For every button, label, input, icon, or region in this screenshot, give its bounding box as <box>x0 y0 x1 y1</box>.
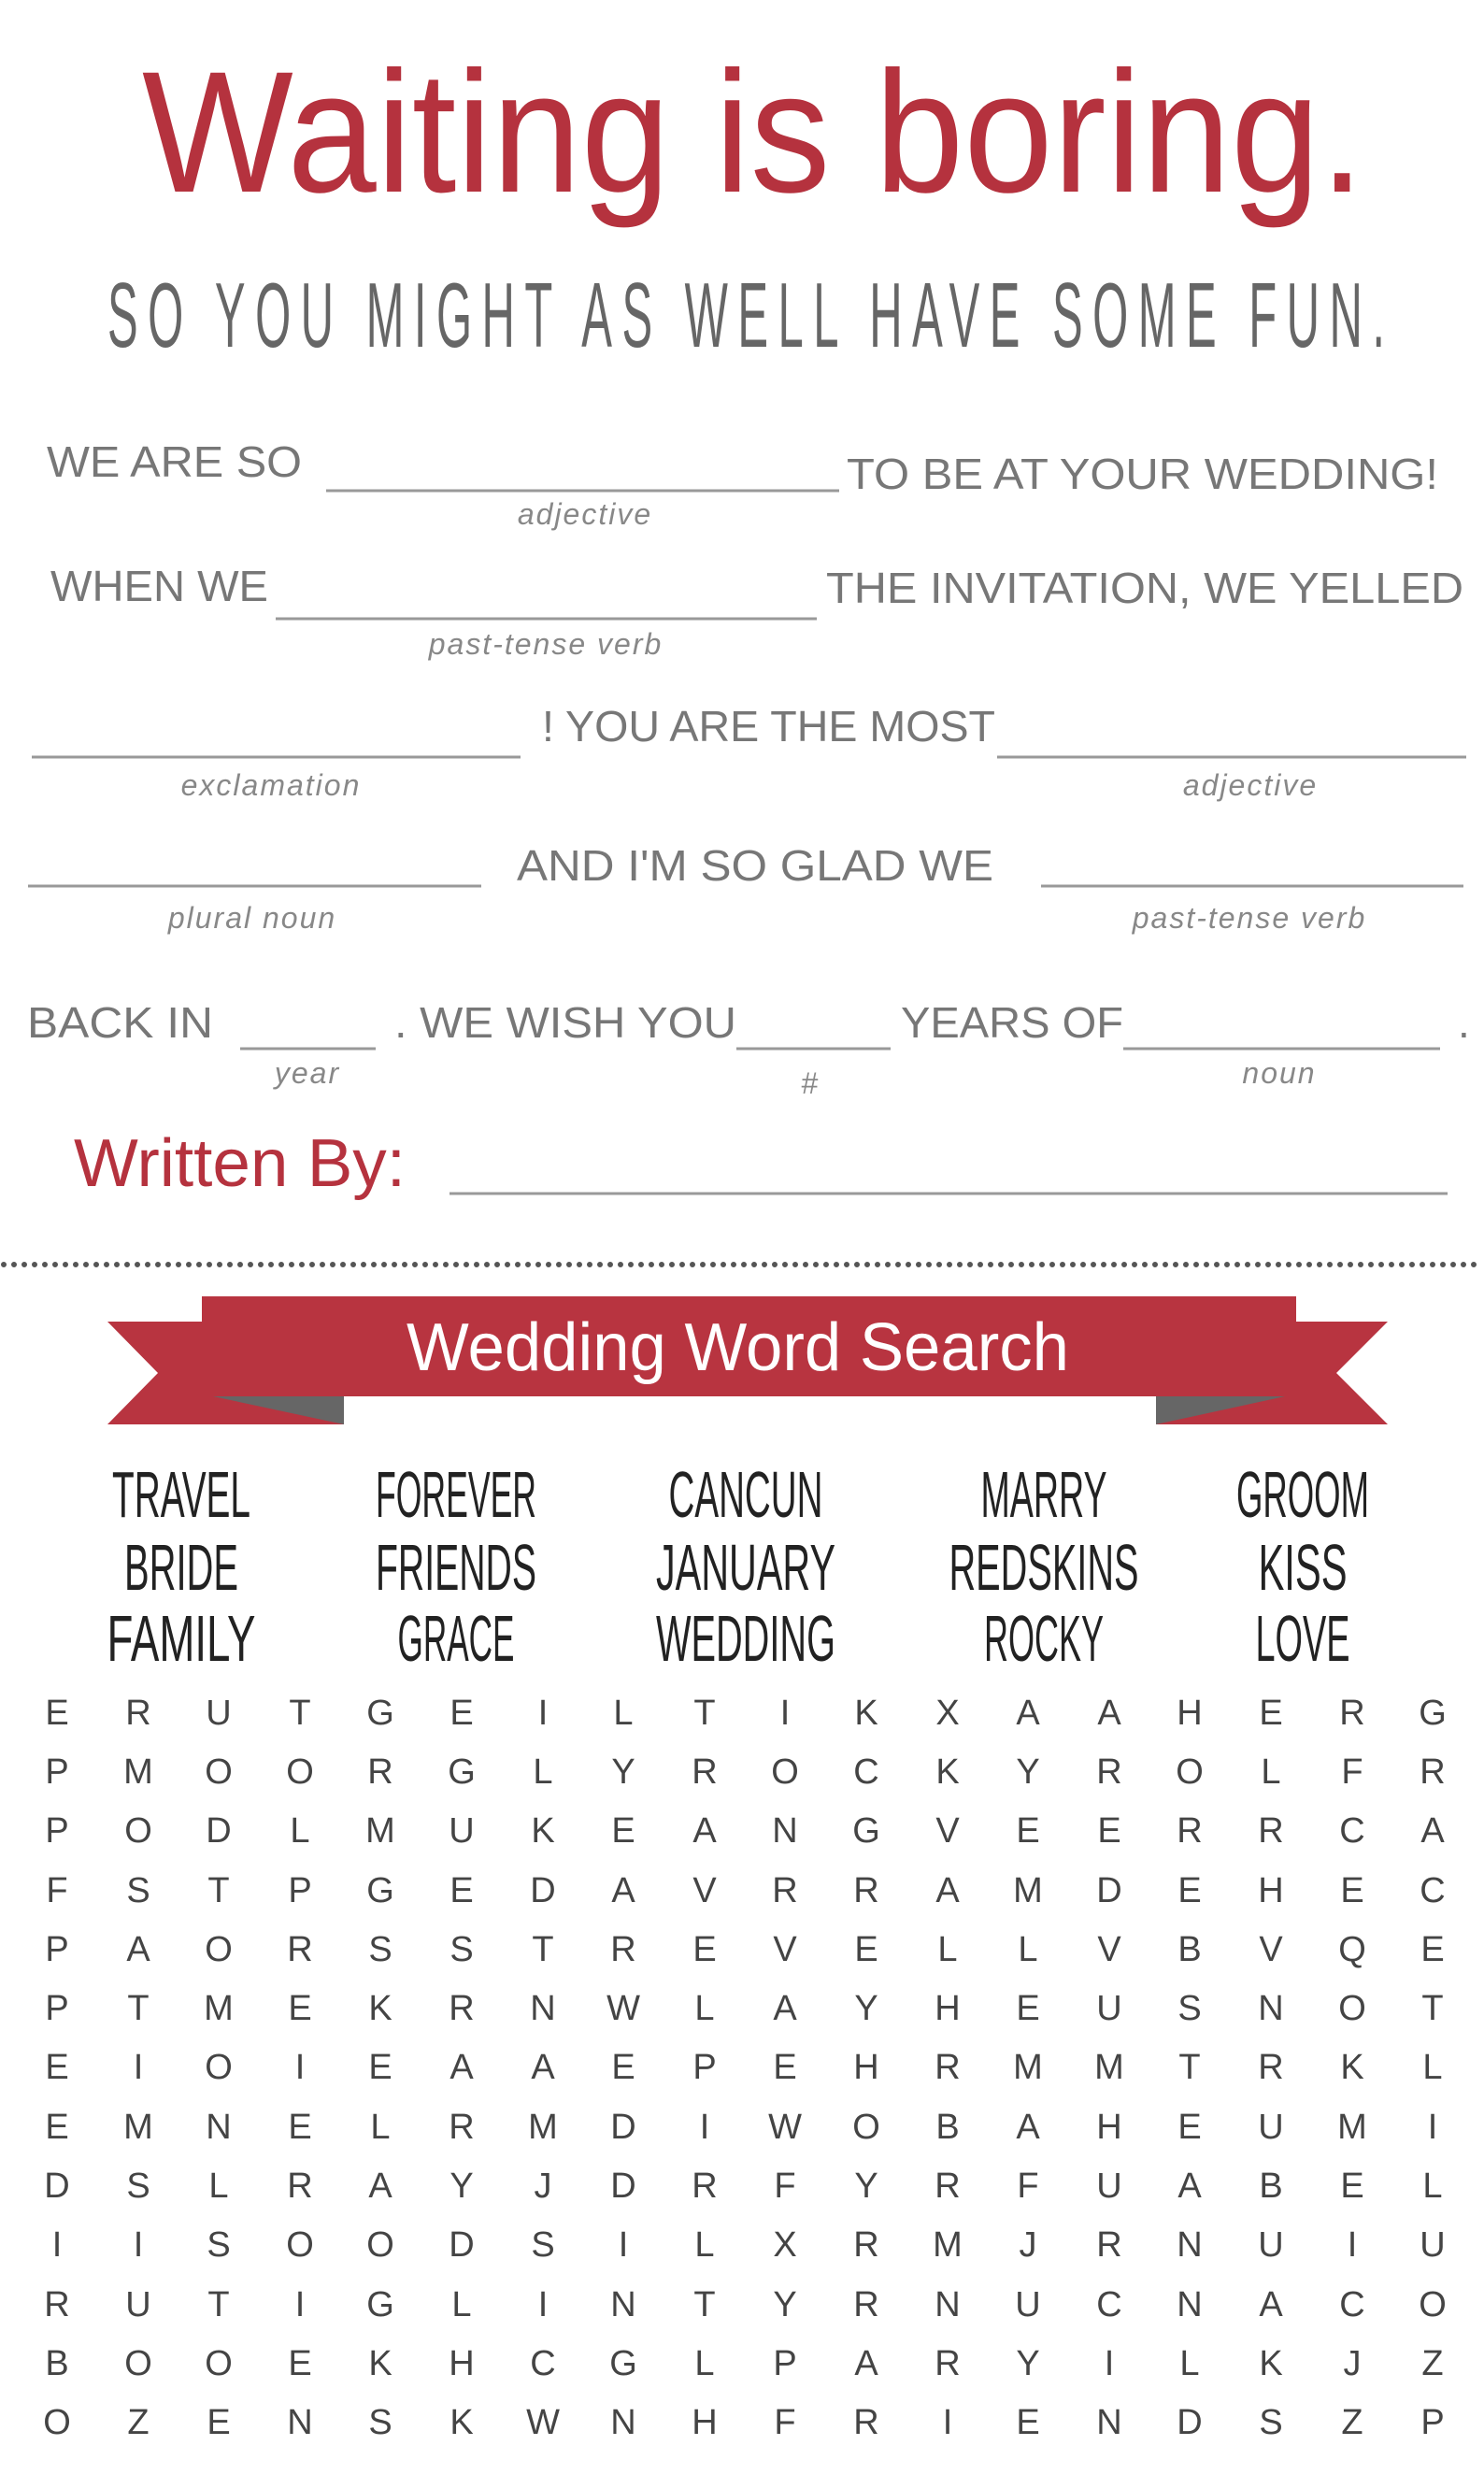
word search grid: A <box>854 2344 878 2383</box>
word search grid: V <box>692 1871 717 1910</box>
word search grid: I <box>619 2225 628 2265</box>
word search grid: S <box>368 2403 392 2442</box>
word search grid: M <box>204 1989 234 2028</box>
word search grid: R <box>1096 1752 1122 1792</box>
mad lib: row 5 <box>27 998 1470 1100</box>
word list: FAMILY <box>107 1602 256 1675</box>
word search grid: U <box>449 1811 475 1851</box>
word search grid: D <box>610 2167 636 2206</box>
word search grid: L <box>290 1811 310 1851</box>
word search grid: E <box>854 1930 878 1969</box>
word search grid: O <box>1338 1989 1366 2028</box>
word search grid: R <box>853 2403 879 2442</box>
word list <box>107 1458 1369 1675</box>
mad lib: row 3: ! YOU ARE THE MOST <box>542 702 995 751</box>
mad lib: row 3: exclamation <box>181 768 361 802</box>
word search grid: W <box>606 1989 640 2028</box>
word search grid: O <box>124 1811 152 1851</box>
word search grid: G <box>366 2285 394 2324</box>
word search grid: F <box>774 2403 796 2442</box>
word search grid: D <box>206 1811 232 1851</box>
word search grid: U <box>1258 2225 1284 2265</box>
word search grid: J <box>1019 2225 1037 2265</box>
word search grid: R <box>1420 1752 1446 1792</box>
word search grid: E <box>368 2048 392 2087</box>
mad lib: row 4 <box>28 841 1463 935</box>
word search grid: L <box>533 1752 553 1792</box>
word search grid: N <box>1177 2225 1203 2265</box>
word search grid: E <box>1016 1989 1040 2028</box>
word search grid: E <box>449 1694 474 1733</box>
word search grid: O <box>286 2225 314 2265</box>
word search grid: K <box>854 1694 878 1733</box>
word search grid: I <box>538 2285 548 2324</box>
word search grid: U <box>1258 2108 1284 2147</box>
word search grid: T <box>532 1930 554 1969</box>
word search grid: E <box>449 1871 474 1910</box>
word search grid: V <box>935 1811 960 1851</box>
word search grid: E <box>611 1811 635 1851</box>
word search grid: B <box>1177 1930 1202 1969</box>
word search grid: A <box>368 2167 392 2206</box>
word search grid: N <box>772 1811 798 1851</box>
word search grid: G <box>609 2344 637 2383</box>
word search grid: J <box>535 2167 551 2206</box>
mad lib: row 5: BACK IN <box>27 998 213 1047</box>
word search grid: N <box>530 1989 556 2028</box>
word search grid: U <box>1420 2225 1446 2265</box>
word search grid: Y <box>854 1989 878 2028</box>
mad lib: row 1: WE ARE SO <box>47 437 302 486</box>
word search grid: E <box>1097 1811 1121 1851</box>
word search grid: L <box>451 2285 472 2324</box>
mad lib: row 2 <box>50 562 1463 661</box>
word list: TRAVEL <box>112 1458 250 1531</box>
word search grid: X <box>773 2225 797 2265</box>
word search grid: L <box>613 1694 634 1733</box>
word search grid: O <box>366 2225 394 2265</box>
word search grid: R <box>1096 2225 1122 2265</box>
word search grid: M <box>933 2225 963 2265</box>
word search grid: N <box>1258 1989 1284 2028</box>
word search grid: B <box>45 2344 69 2383</box>
word search grid: R <box>1258 1811 1284 1851</box>
word search grid: L <box>694 2344 715 2383</box>
word search grid: A <box>531 2048 555 2087</box>
word search grid: M <box>123 1752 153 1792</box>
word list: REDSKINS <box>949 1531 1138 1604</box>
word search grid: P <box>288 1871 312 1910</box>
word search grid: I <box>295 2285 305 2324</box>
mad lib: row 1: adjective <box>518 497 652 531</box>
word search grid: T <box>1421 1989 1444 2028</box>
word search grid: F <box>774 2167 796 2206</box>
word search grid: K <box>531 1811 555 1851</box>
word search grid: G <box>852 1811 880 1851</box>
word search grid: U <box>125 2285 151 2324</box>
word search grid: B <box>1259 2167 1283 2206</box>
word search grid: Z <box>127 2403 150 2442</box>
word list: GRACE <box>398 1602 514 1675</box>
word search grid: L <box>937 1930 958 1969</box>
word search grid: S <box>1259 2403 1283 2442</box>
word search grid: F <box>1341 1752 1363 1792</box>
word search grid: R <box>1258 2048 1284 2087</box>
word search grid: C <box>530 2344 556 2383</box>
word search grid: H <box>1096 2108 1122 2147</box>
word search grid: M <box>1337 2108 1367 2147</box>
word search grid: I <box>52 2225 62 2265</box>
mad lib: row 3: adjective <box>1183 768 1318 802</box>
word search grid: D <box>1096 1871 1122 1910</box>
word search grid: U <box>206 1694 232 1733</box>
word search grid: E <box>45 1694 69 1733</box>
word search grid: J <box>1344 2344 1361 2383</box>
word search grid: R <box>610 1930 636 1969</box>
word search grid: Y <box>773 2285 797 2324</box>
word search grid: P <box>1420 2403 1445 2442</box>
word search grid: R <box>449 2108 475 2147</box>
word search grid: P <box>692 2048 717 2087</box>
word search grid: K <box>368 2344 392 2383</box>
word list: KISS <box>1258 1531 1348 1604</box>
word search grid: R <box>853 2285 879 2324</box>
mad lib: row 5: YEARS OF <box>901 998 1123 1047</box>
word search grid: T <box>207 1871 230 1910</box>
word search grid: R <box>935 2344 961 2383</box>
word search grid: N <box>610 2403 636 2442</box>
word search grid: I <box>1428 2108 1437 2147</box>
word search grid: E <box>1177 1871 1202 1910</box>
word search grid: E <box>1016 2403 1040 2442</box>
word search grid: V <box>1259 1930 1283 1969</box>
word search grid: L <box>694 2225 715 2265</box>
word search grid: L <box>370 2108 391 2147</box>
word search grid: H <box>935 1989 961 2028</box>
word search grid: N <box>1177 2285 1203 2324</box>
mad lib: row 5: . WE WISH YOU <box>394 998 736 1047</box>
mad lib: row 4: past-tense verb <box>1132 901 1366 935</box>
word search grid: A <box>1259 2285 1283 2324</box>
mad lib: row 4: AND I'M SO GLAD WE <box>517 841 993 890</box>
subtitle: SO YOU MIGHT AS WELL HAVE SOME FUN. <box>107 265 1385 367</box>
word search grid: A <box>1420 1811 1445 1851</box>
mad lib: row 5: # <box>801 1066 819 1100</box>
word search grid: L <box>1018 1930 1038 1969</box>
word search grid: R <box>935 2048 961 2087</box>
title: Waiting is boring. <box>142 36 1364 229</box>
word search grid: L <box>1422 2048 1443 2087</box>
word search grid: T <box>207 2285 230 2324</box>
word search grid: E <box>1016 1811 1040 1851</box>
word search grid: H <box>692 2403 718 2442</box>
word search grid: M <box>1013 1871 1043 1910</box>
word search grid: K <box>1259 2344 1283 2383</box>
mad lib: row 2: past-tense verb <box>428 627 663 661</box>
word list: GROOM <box>1236 1458 1369 1531</box>
word search grid: C <box>1420 1871 1446 1910</box>
word search grid: I <box>1348 2225 1357 2265</box>
word search grid: P <box>45 1930 69 1969</box>
word search grid: I <box>700 2108 709 2147</box>
word search grid: I <box>538 1694 548 1733</box>
word search grid: E <box>1340 1871 1364 1910</box>
word search grid: T <box>127 1989 150 2028</box>
word search grid: R <box>287 2167 313 2206</box>
word search grid: K <box>449 2403 474 2442</box>
banner: Wedding Word Search: Wedding Word Search <box>407 1310 1069 1385</box>
word search grid: S <box>1177 1989 1202 2028</box>
word search grid: P <box>45 1811 69 1851</box>
word search grid: O <box>1176 1752 1204 1792</box>
word search grid: E <box>692 1930 717 1969</box>
word search grid: E <box>611 2048 635 2087</box>
word search grid: F <box>46 1871 68 1910</box>
word list: JANUARY <box>656 1531 835 1604</box>
word search grid: E <box>207 2403 231 2442</box>
word search grid: M <box>1094 2048 1124 2087</box>
word search grid: E <box>1177 2108 1202 2147</box>
word search grid: U <box>1015 2285 1041 2324</box>
word search grid: A <box>611 1871 635 1910</box>
word search grid: P <box>773 2344 797 2383</box>
word search grid: S <box>531 2225 555 2265</box>
word search grid: R <box>692 2167 718 2206</box>
word search grid: Y <box>1016 2344 1040 2383</box>
word search grid: E <box>45 2048 69 2087</box>
word search grid: R <box>853 1871 879 1910</box>
word search grid: A <box>1097 1694 1121 1733</box>
word search grid: T <box>693 1694 716 1733</box>
mad lib: row 1 <box>47 437 1438 531</box>
word search grid: M <box>123 2108 153 2147</box>
word search grid: I <box>780 1694 790 1733</box>
word search grid: R <box>692 1752 718 1792</box>
word search grid: O <box>124 2344 152 2383</box>
word search grid: G <box>366 1694 394 1733</box>
word search grid: F <box>1017 2167 1039 2206</box>
word search grid: E <box>1420 1930 1445 1969</box>
word list: WEDDING <box>656 1602 835 1675</box>
word search grid: C <box>1096 2285 1122 2324</box>
word search grid: D <box>530 1871 556 1910</box>
word search grid: I <box>134 2048 143 2087</box>
word search grid: S <box>207 2225 231 2265</box>
mad lib: row 5: year <box>273 1056 340 1090</box>
word search grid: E <box>45 2108 69 2147</box>
word search grid: O <box>205 1930 233 1969</box>
word search grid: A <box>449 2048 474 2087</box>
word search grid: A <box>1177 2167 1202 2206</box>
word search grid: C <box>1339 1811 1365 1851</box>
word search grid: E <box>1340 2167 1364 2206</box>
word search grid: W <box>526 2403 560 2442</box>
word search grid: R <box>287 1930 313 1969</box>
word search grid: N <box>610 2285 636 2324</box>
word search grid: R <box>367 1752 393 1792</box>
word search grid: T <box>693 2285 716 2324</box>
word search grid: K <box>1340 2048 1364 2087</box>
word search grid: I <box>1105 2344 1114 2383</box>
word search grid: P <box>45 1752 69 1792</box>
word list: CANCUN <box>669 1458 822 1531</box>
word search grid: D <box>1177 2403 1203 2442</box>
mad lib: row 1: TO BE AT YOUR WEDDING! <box>847 450 1438 498</box>
mad lib: row 5: noun <box>1242 1056 1317 1090</box>
word search grid: R <box>772 1871 798 1910</box>
word search grid: W <box>768 2108 802 2147</box>
word search grid: S <box>126 2167 150 2206</box>
word search grid: K <box>368 1989 392 2028</box>
word search grid: H <box>449 2344 475 2383</box>
word search grid: E <box>773 2048 797 2087</box>
word search grid: S <box>368 1930 392 1969</box>
word search grid: V <box>1097 1930 1121 1969</box>
word search grid: D <box>610 2108 636 2147</box>
word search grid: O <box>205 2344 233 2383</box>
word search grid: O <box>852 2108 880 2147</box>
word search grid: D <box>449 2225 475 2265</box>
word list: MARRY <box>981 1458 1106 1531</box>
word search grid: O <box>771 1752 799 1792</box>
word list: FOREVER <box>376 1458 536 1531</box>
word search grid: S <box>449 1930 474 1969</box>
word search grid: I <box>134 2225 143 2265</box>
banner: Wedding Word Search <box>107 1296 1388 1424</box>
word search grid: L <box>208 2167 229 2206</box>
word search grid: S <box>126 1871 150 1910</box>
word search grid: R <box>449 1989 475 2028</box>
word search grid: M <box>1013 2048 1043 2087</box>
mad lib: row 2: THE INVITATION, WE YELLED <box>826 564 1463 612</box>
word search grid: U <box>1096 1989 1122 2028</box>
word search grid: L <box>1261 1752 1281 1792</box>
word search grid: E <box>288 2344 312 2383</box>
mad lib: row 5: . <box>1458 998 1470 1047</box>
word search grid: G <box>366 1871 394 1910</box>
word search grid: O <box>43 2403 71 2442</box>
word search grid <box>43 1694 1447 2442</box>
word search grid: I <box>295 2048 305 2087</box>
word search grid: Y <box>449 2167 474 2206</box>
word search grid: R <box>1177 1811 1203 1851</box>
word search grid: A <box>935 1871 960 1910</box>
word search grid: A <box>773 1989 797 2028</box>
word list: FRIENDS <box>376 1531 536 1604</box>
word search grid: L <box>1179 2344 1200 2383</box>
word search grid: Z <box>1421 2344 1444 2383</box>
word search grid: U <box>1096 2167 1122 2206</box>
word search grid: B <box>935 2108 960 2147</box>
mad lib: row 4: plural noun <box>167 901 336 935</box>
word search grid: X <box>935 1694 960 1733</box>
word search grid: A <box>1016 2108 1040 2147</box>
word search grid: G <box>1419 1694 1447 1733</box>
word search grid: L <box>694 1989 715 2028</box>
word search grid: M <box>528 2108 558 2147</box>
word search grid: Y <box>1016 1752 1040 1792</box>
word search grid: H <box>853 2048 879 2087</box>
word search grid: R <box>935 2167 961 2206</box>
word search grid: R <box>125 1694 151 1733</box>
word search grid: N <box>287 2403 313 2442</box>
word search grid: I <box>943 2403 952 2442</box>
word search grid: G <box>448 1752 476 1792</box>
word search grid: Y <box>854 2167 878 2206</box>
word search grid: Q <box>1338 1930 1366 1969</box>
word search grid: K <box>935 1752 960 1792</box>
word search grid: V <box>773 1930 797 1969</box>
word search grid: R <box>1339 1694 1365 1733</box>
word search grid: E <box>288 2108 312 2147</box>
word list: LOVE <box>1256 1602 1349 1675</box>
word search grid: A <box>126 1930 150 1969</box>
word search grid: O <box>1419 2285 1447 2324</box>
word search grid: O <box>286 1752 314 1792</box>
word search grid: C <box>1339 2285 1365 2324</box>
word search grid: N <box>206 2108 232 2147</box>
word search grid: Z <box>1341 2403 1363 2442</box>
word search grid: O <box>205 1752 233 1792</box>
word search grid: A <box>1016 1694 1040 1733</box>
word search grid: R <box>853 2225 879 2265</box>
word search grid: T <box>289 1694 311 1733</box>
word search grid: N <box>935 2285 961 2324</box>
word search grid: R <box>44 2285 70 2324</box>
mad lib: row 2: WHEN WE <box>50 562 268 610</box>
word search grid: T <box>1178 2048 1201 2087</box>
word search grid: P <box>45 1989 69 2028</box>
mad lib: row 3 <box>32 702 1466 802</box>
word list: BRIDE <box>124 1531 238 1604</box>
written by signature: Written By: <box>74 1126 406 1201</box>
word search grid: D <box>44 2167 70 2206</box>
word search grid: H <box>1177 1694 1203 1733</box>
word list: ROCKY <box>984 1602 1104 1675</box>
word search grid: E <box>288 1989 312 2028</box>
word search grid: L <box>1422 2167 1443 2206</box>
word search grid: C <box>853 1752 879 1792</box>
word search grid: O <box>205 2048 233 2087</box>
word search grid: H <box>1258 1871 1284 1910</box>
word search grid: Y <box>611 1752 635 1792</box>
word search grid: N <box>1096 2403 1122 2442</box>
word search grid: E <box>1259 1694 1283 1733</box>
word search grid: M <box>365 1811 395 1851</box>
word search grid: A <box>692 1811 717 1851</box>
